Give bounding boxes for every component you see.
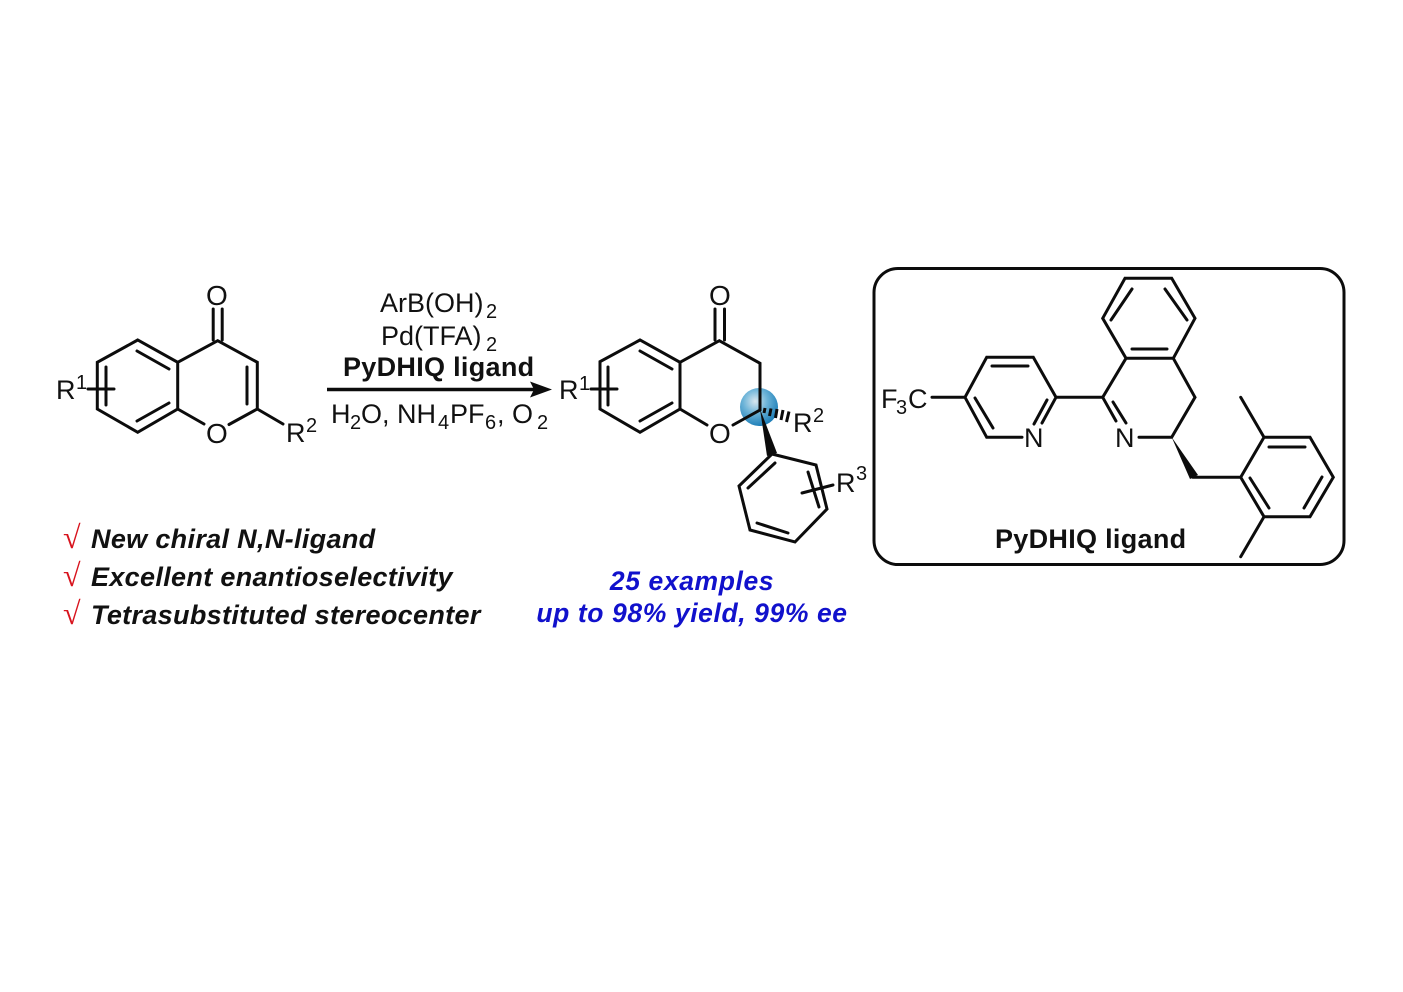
ligand structure: N: [1115, 423, 1134, 453]
reaction conditions below arrow: 2: [350, 412, 361, 434]
highlight: enantioselectivity: Excellent enantioselectivity: [91, 562, 455, 592]
reaction conditions above arrow: [343, 288, 534, 382]
reactant: chromone structure: 2: [306, 415, 317, 437]
product: chiral chromanone structure: 3: [856, 463, 867, 485]
ligand structure: 3: [896, 397, 907, 419]
product: chiral chromanone structure: [559, 280, 867, 542]
ligand structure: C: [908, 384, 928, 414]
reaction conditions above arrow: PyDHIQ ligand: [343, 352, 534, 382]
reaction conditions below arrow: O, NH: [361, 399, 436, 429]
reaction conditions above arrow: 2: [486, 301, 497, 323]
reaction conditions below arrow: 4: [438, 412, 449, 434]
reaction conditions below arrow: PF: [450, 399, 485, 429]
reactant: chromone structure: [56, 280, 317, 449]
highlight: stereocenter: √: [63, 595, 81, 631]
ligand structure: N: [1024, 423, 1044, 453]
reaction conditions below arrow: 2: [537, 412, 548, 434]
reactant: chromone structure: R: [286, 418, 306, 448]
results summary: 25 examples: [609, 566, 774, 596]
stereocenter highlight ball: [740, 388, 778, 426]
reaction conditions below arrow: , O: [497, 399, 533, 429]
product: chiral chromanone structure: R: [836, 468, 856, 498]
highlights list: [63, 519, 482, 631]
reaction arrow: [327, 382, 552, 398]
ligand label: PyDHIQ ligand: [995, 524, 1186, 554]
results summary: [536, 566, 848, 628]
product: chiral chromanone structure: R: [793, 408, 812, 438]
reaction conditions below arrow: [331, 399, 548, 434]
panel: PyDHIQ ligand: [874, 268, 1344, 564]
highlight: new ligand: √: [63, 519, 81, 555]
product: chiral chromanone structure: O: [709, 280, 731, 311]
reaction conditions above arrow: ArB(OH): [380, 288, 484, 318]
ligand structure: F: [881, 384, 898, 414]
reactant: chromone structure: R: [56, 375, 76, 405]
reactant: chromone structure: 1: [76, 372, 87, 394]
reaction conditions above arrow: 2: [486, 334, 497, 356]
highlight: stereocenter: Tetrasubstituted stereocenter: [91, 600, 482, 630]
reaction conditions below arrow: 6: [485, 412, 496, 434]
reactant: chromone structure: O: [206, 280, 228, 311]
reaction conditions below arrow: H: [331, 399, 350, 429]
ligand structure: [881, 278, 1333, 557]
product: chiral chromanone structure: O: [709, 418, 731, 449]
product: chiral chromanone structure: 1: [579, 373, 590, 395]
reactant: chromone structure: O: [206, 418, 228, 449]
product: chiral chromanone structure: 2: [813, 405, 824, 427]
highlight: new ligand: New chiral N,N-ligand: [91, 524, 376, 554]
results summary: up to 98% yield, 99% ee: [536, 598, 848, 628]
highlight: enantioselectivity: √: [63, 557, 81, 593]
reaction conditions above arrow: Pd(TFA): [381, 321, 482, 351]
product: chiral chromanone structure: R: [559, 375, 578, 405]
